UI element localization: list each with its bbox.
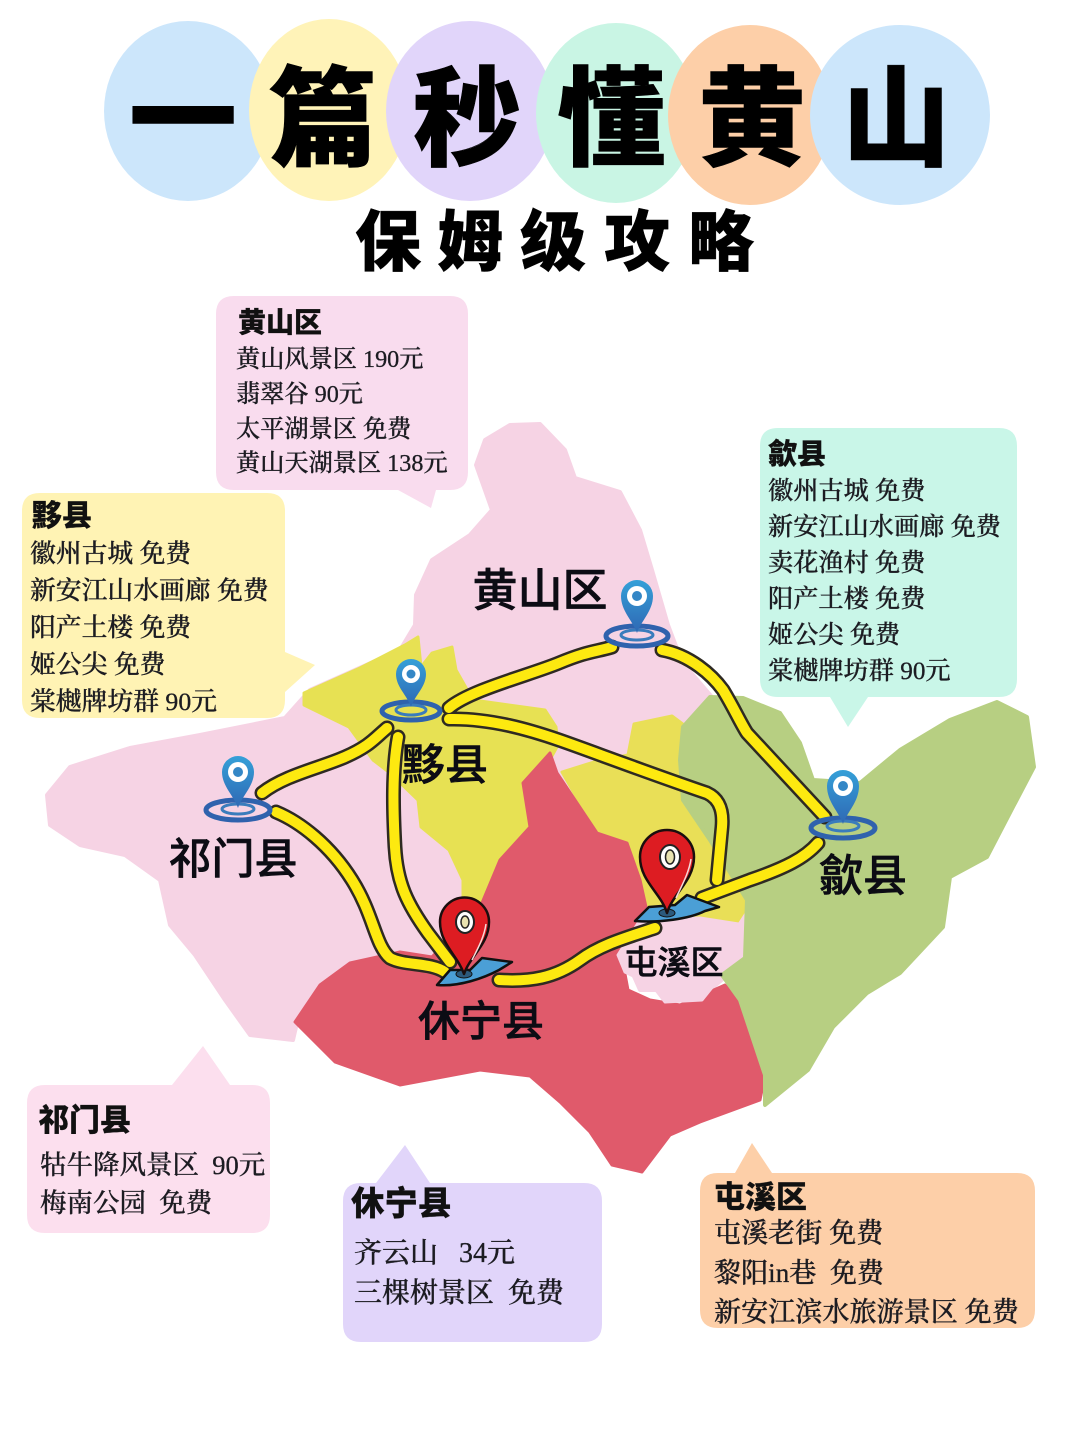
region: 歙县 (green) — [680, 697, 1034, 1105]
title: 一篇秒懂黄山 — [104, 19, 990, 205]
title background circles — [104, 19, 990, 205]
icon: blue pin 歙县 — [811, 770, 875, 838]
panel: 休宁县 — [343, 1145, 602, 1342]
attractions list — [354, 1237, 566, 1309]
region: 屯溪 surrounding (yellow) — [562, 716, 748, 925]
attractions list: 牯牛降风景区 90元 — [40, 1150, 265, 1180]
attractions list: 新安江山水画廊 免费 — [768, 513, 1003, 541]
title characters: 秒 — [413, 59, 521, 180]
icon: blue pin 黄山区 — [606, 580, 668, 646]
attractions list — [40, 1150, 265, 1218]
icon: blue pin 祁门县 — [206, 756, 270, 820]
attractions list: 新安江山水画廊 免费 — [30, 576, 271, 605]
attractions list: 黄山风景区 190元 — [236, 346, 423, 373]
attractions list: 姬公尖 免费 — [768, 621, 902, 649]
map of Huangshan — [47, 424, 1034, 1172]
attractions list: 阳产土楼 免费 — [768, 585, 927, 613]
title characters: 篇 — [269, 59, 377, 180]
map labels: 休宁县 — [418, 998, 544, 1045]
panel: 祁门县 — [27, 1046, 270, 1233]
attractions list — [236, 346, 448, 477]
attractions list — [768, 477, 1003, 685]
panel: 黟县 — [22, 493, 315, 718]
title characters: 山 — [842, 59, 950, 180]
map labels: 屯溪区 — [624, 944, 724, 981]
attractions list: 徽州古城 免费 — [30, 539, 193, 568]
attractions list: 阳产土楼 免费 — [30, 613, 193, 642]
heading: 休宁县 — [351, 1186, 452, 1223]
subtitle: 保姆级攻略: 姆 — [437, 205, 503, 279]
subtitle: 保姆级攻略: 保 — [355, 205, 421, 279]
subtitle: 保姆级攻略: 略 — [688, 205, 754, 279]
attractions list — [30, 539, 271, 716]
region: 屯溪区 (pink) — [618, 918, 745, 1002]
heading: 屯溪区 — [714, 1180, 807, 1215]
heading: 歙县 — [768, 437, 826, 471]
attractions list: 翡翠谷 90元 — [236, 381, 363, 408]
map labels: 黄山区 — [472, 565, 608, 616]
map labels — [168, 565, 907, 1045]
attractions list: 太平湖景区 免费 — [236, 416, 413, 443]
map labels: 祁门县 — [168, 836, 298, 884]
attractions list: 徽州古城 免费 — [768, 477, 927, 505]
attractions list: 棠樾牌坊群 90元 — [768, 657, 951, 685]
panel: 黄山区 — [216, 296, 468, 508]
region: 休宁县 (red) — [295, 753, 765, 1172]
region: 黟县 (yellow) — [304, 637, 558, 903]
attractions list: 黄山天湖景区 138元 — [236, 450, 448, 477]
panel: 屯溪区 — [700, 1143, 1035, 1328]
subtitle: 保姆级攻略: 攻 — [604, 205, 670, 279]
attractions list: 姬公尖 免费 — [30, 650, 168, 679]
routes (yellow roads) — [262, 647, 825, 980]
attractions list — [714, 1218, 1021, 1327]
attractions list: 卖花渔村 免费 — [768, 549, 927, 577]
title characters — [129, 59, 950, 180]
map labels: 黟县 — [402, 742, 488, 790]
attractions list: 三棵树景区 免费 — [354, 1277, 566, 1309]
heading: 黟县 — [32, 500, 92, 533]
title characters: 懂 — [557, 59, 665, 180]
icon: red pin 屯溪区 — [635, 830, 719, 922]
region: 祁门县 and 黄山区 (pink) — [47, 424, 745, 1040]
attractions list: 齐云山 34元 — [354, 1237, 515, 1269]
icon: red pin 休宁县 — [437, 898, 512, 985]
subtitle: 保姆级攻略: 级 — [520, 205, 586, 279]
attractions list: 新安江滨水旅游景区 免费 — [714, 1297, 1021, 1327]
map labels: 歙县 — [819, 852, 907, 901]
panel: 歙县 — [760, 428, 1017, 727]
icon: blue pin 黟县 — [382, 659, 440, 720]
attractions list: 黎阳in巷 免费 — [714, 1258, 886, 1288]
subtitle: 保姆级攻略 — [355, 205, 754, 279]
attractions list: 棠樾牌坊群 90元 — [30, 687, 217, 716]
attractions list: 梅南公园 免费 — [40, 1188, 214, 1218]
title characters: 一 — [129, 59, 237, 180]
heading: 祁门县 — [38, 1103, 131, 1138]
attractions list: 屯溪老街 免费 — [714, 1218, 885, 1248]
heading: 黄山区 — [238, 307, 322, 338]
title characters: 黄 — [698, 59, 806, 180]
